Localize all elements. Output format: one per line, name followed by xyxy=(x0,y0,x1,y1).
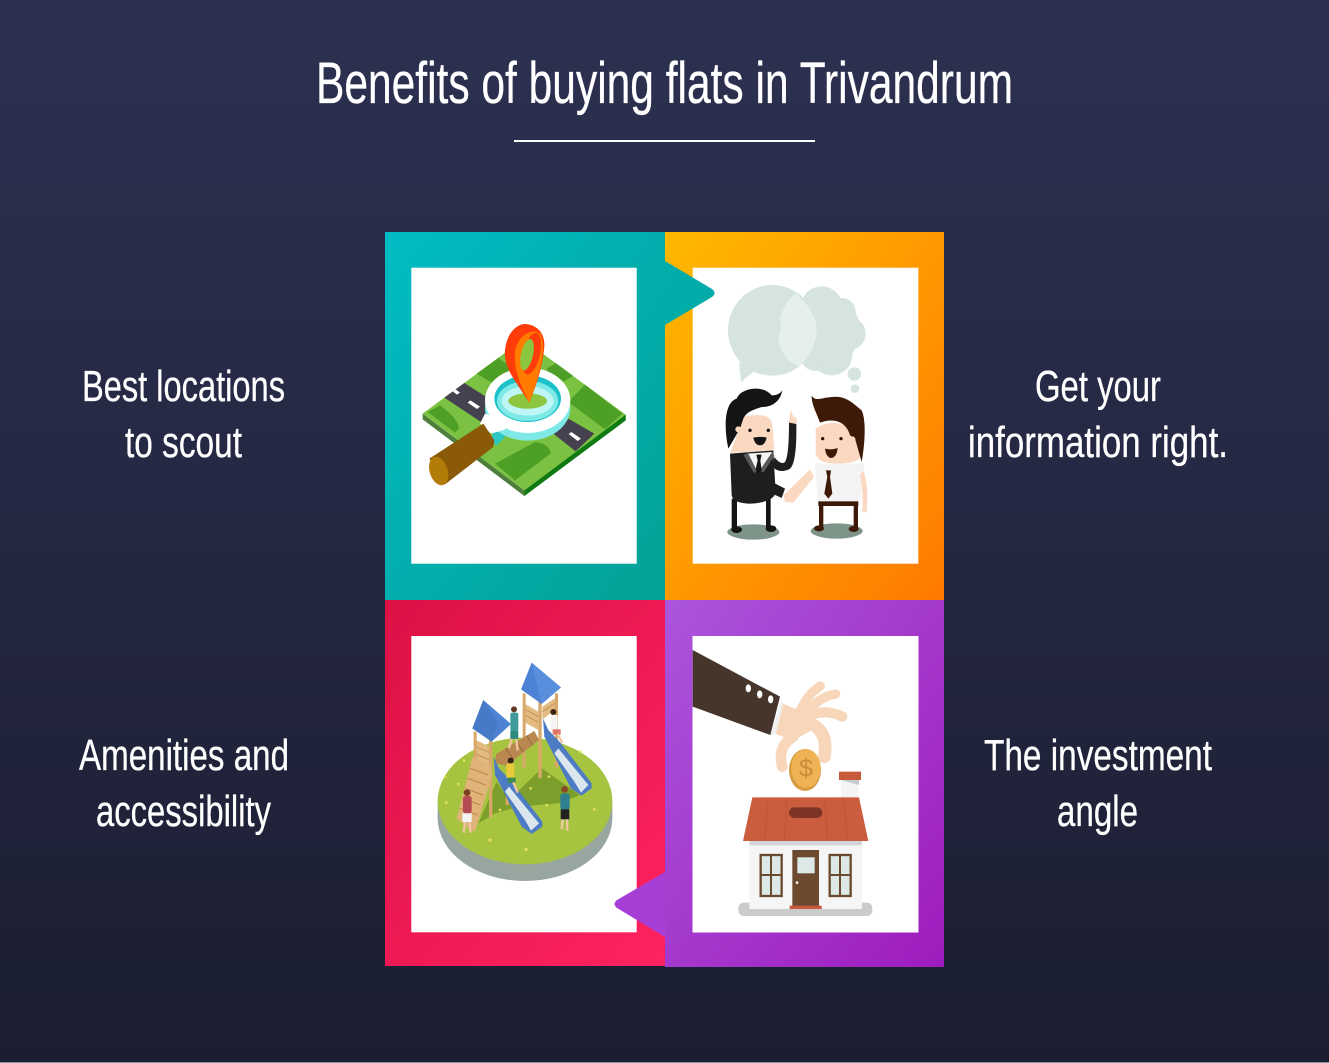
label: best locations: Best locations xyxy=(82,362,285,411)
label: best locations xyxy=(82,362,285,467)
icon: hand dropping coin into house xyxy=(693,650,872,916)
icon: hand dropping coin into house: $ xyxy=(799,755,813,783)
label: amenities and accessibility: accessibility xyxy=(96,787,271,836)
label: amenities and accessibility: Amenities and xyxy=(79,731,289,780)
title underline xyxy=(514,140,815,142)
title: Benefits of buying flats in Trivandrum xyxy=(316,51,1013,116)
icon: two businessmen talking xyxy=(726,285,867,540)
icon: map with magnifier and pin xyxy=(423,324,626,496)
panel: red amenities xyxy=(385,600,665,966)
panel: purple investment xyxy=(665,600,944,967)
label: get your information right: information right. xyxy=(968,418,1228,467)
label: best locations: to scout xyxy=(125,418,242,467)
arrow: teal pointer xyxy=(665,261,714,325)
panel: teal location xyxy=(385,232,665,600)
label: the investment angle: angle xyxy=(1057,787,1138,836)
icon: playground on green disc xyxy=(438,663,612,881)
flowers xyxy=(444,750,596,851)
label: get your information right xyxy=(968,362,1228,467)
panel: orange information xyxy=(665,232,944,600)
label: amenities and accessibility xyxy=(79,731,289,836)
arrow: purple pointer xyxy=(614,872,665,937)
label: get your information right: Get your xyxy=(1035,362,1161,411)
label: the investment angle xyxy=(984,731,1212,836)
figures xyxy=(511,706,517,712)
label: the investment angle: The investment xyxy=(984,731,1212,780)
